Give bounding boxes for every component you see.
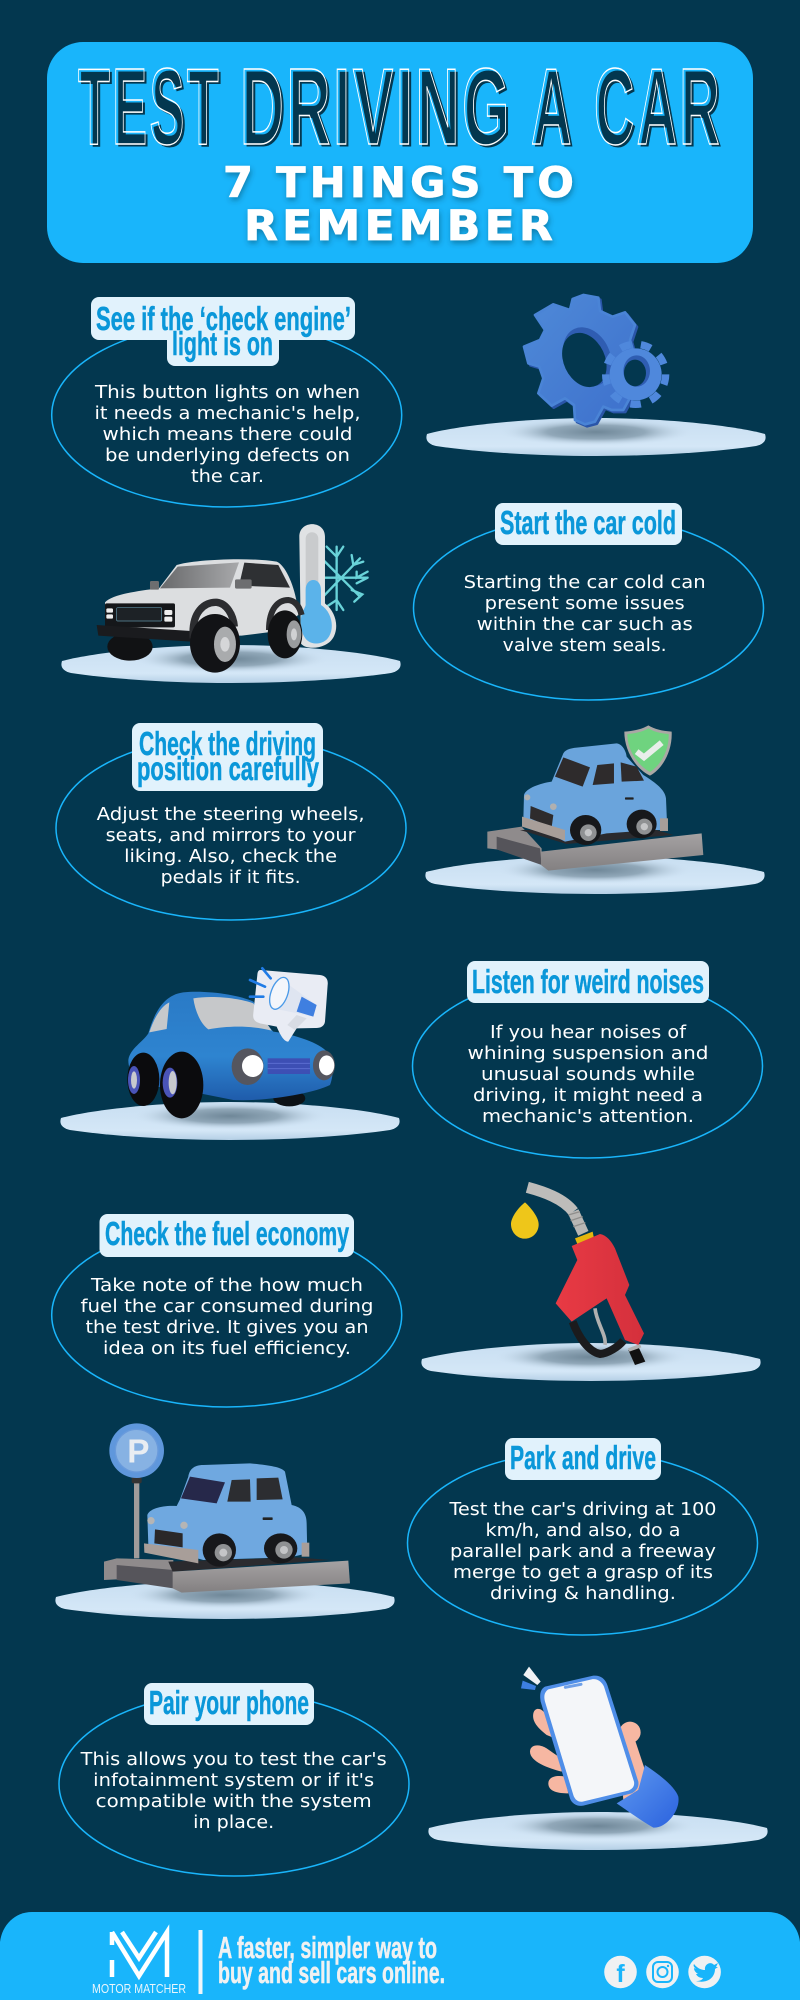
text: fuel economy: Take note of the how much: [90, 1275, 363, 1296]
platform 7: [428, 1812, 768, 1850]
label: fuel economy: Check the fuel economy: [105, 1215, 349, 1252]
icon: facebook: [604, 1956, 637, 1988]
text: check engine: This button lights on when: [94, 382, 360, 403]
icon: instagram: [646, 1956, 679, 1988]
title: A: [531, 46, 574, 168]
header panel: [47, 42, 753, 263]
title: DRIVING: [242, 48, 514, 170]
text: weird noises: driving, it might need a: [473, 1085, 703, 1106]
label: driving position: [132, 723, 323, 791]
text: park and drive: driving & handling.: [490, 1583, 676, 1604]
label: park and drive: [505, 1438, 661, 1480]
text: check engine: be underlying defects on: [105, 445, 350, 466]
text: park and drive: parallel park and a freeway: [450, 1541, 716, 1562]
text: check engine: it needs a mechanic's help,: [94, 403, 360, 424]
footer: [0, 1912, 800, 2000]
text: park and drive: km/h, and also, do a: [486, 1520, 680, 1541]
title: A: [534, 48, 576, 170]
icon: parking sign: P: [127, 1434, 149, 1471]
platform 3: [425, 856, 765, 894]
panel: weird noises: [412, 961, 762, 1158]
label: driving position: Check the driving: [139, 725, 316, 762]
icon: fuel nozzle: [511, 1187, 645, 1365]
label: fuel economy: [100, 1214, 354, 1257]
text: start cold: valve stem seals.: [503, 635, 667, 656]
logo: [92, 1932, 186, 1996]
icon: gears: [524, 295, 666, 426]
panel: start the car cold: [414, 503, 764, 700]
text: pair phone: compatible with the system: [96, 1791, 372, 1812]
icon: blue car with megaphone: [127, 968, 335, 1118]
text: pair phone: This allows you to test the car's: [80, 1749, 387, 1770]
icon: parking sign and car: [104, 1423, 350, 1593]
title: DRIVING: [240, 46, 512, 168]
text: fuel economy: idea on its fuel efficiency.: [103, 1338, 351, 1359]
text: park and drive: [448, 1499, 716, 1604]
text: weird noises: If you hear noises of: [490, 1022, 687, 1043]
label: driving position: position carefully: [137, 750, 319, 787]
icon: megaphone bubble: [250, 968, 328, 1042]
text: driving position: [97, 804, 365, 888]
text: driving position: seats, and mirrors to your: [106, 825, 356, 846]
platform 1: [426, 418, 766, 456]
text: check engine: which means there could: [102, 424, 352, 445]
text: driving position: Adjust the steering wheels,: [97, 804, 365, 825]
platform 6: [55, 1581, 395, 1619]
label: check engine: [91, 297, 355, 366]
icon: facebook: f: [616, 1960, 625, 1988]
label: start cold: Start the car cold: [500, 504, 676, 541]
label: check engine: See if the ‘check engine’: [96, 300, 351, 337]
text: park and drive: Test the car's driving at 100: [448, 1499, 716, 1520]
text: driving position: pedals if it fits.: [161, 867, 301, 888]
label: pair phone: Pair your phone: [149, 1684, 309, 1721]
subtitle: 7 THINGS TO: [223, 158, 578, 207]
text: start cold: within the car such as: [477, 614, 693, 635]
text: weird noises: [468, 1022, 708, 1127]
icon: car on lift with shield: [487, 725, 703, 871]
icon: suv with thermometer and snowflake: [97, 524, 368, 673]
panel: check engine light: [52, 297, 402, 507]
tagline: [218, 1930, 445, 1990]
panel: pair your phone: [59, 1683, 409, 1876]
text: weird noises: mechanic's attention.: [482, 1106, 694, 1127]
text: check engine: the car.: [191, 466, 264, 487]
text: driving position: liking. Also, check the: [124, 846, 337, 867]
tagline: buy and sell cars online.: [218, 1955, 445, 1990]
text: start cold: present some issues: [485, 593, 685, 614]
text: weird noises: unusual sounds while: [481, 1064, 695, 1085]
icon: shield: [624, 725, 672, 776]
label: start cold: [495, 503, 682, 545]
panel: fuel economy: [52, 1214, 402, 1407]
label: park and drive: Park and drive: [510, 1439, 656, 1476]
text: park and drive: merge to get a grasp of its: [453, 1562, 713, 1583]
text: start cold: [464, 572, 706, 656]
label: weird noises: [467, 961, 709, 1003]
label: check engine: light is on: [172, 325, 273, 362]
text: pair phone: in place.: [193, 1812, 274, 1833]
text: start cold: Starting the car cold can: [464, 572, 706, 593]
text: fuel economy: [80, 1275, 374, 1359]
platform 4: [60, 1102, 400, 1140]
text: fuel economy: fuel the car consumed during: [80, 1296, 374, 1317]
text: pair phone: [80, 1749, 387, 1833]
icon: parking sign: [109, 1423, 164, 1558]
subtitle: REMEMBER: [244, 201, 557, 250]
panel: driving position: [56, 723, 406, 920]
platform 2: [61, 645, 401, 683]
icon: twitter: [688, 1956, 721, 1988]
text: pair phone: infotainment system or if it's: [93, 1770, 374, 1791]
tagline: A faster, simpler way to: [218, 1930, 437, 1965]
text: fuel economy: the test drive. It gives you an: [86, 1317, 368, 1338]
text: weird noises: whining suspension and: [468, 1043, 708, 1064]
text: check engine: [94, 382, 360, 487]
subtitle: [223, 158, 578, 250]
icon: hand with phone: [521, 1667, 679, 1828]
title: TEST: [78, 46, 221, 168]
title: TEST: [80, 48, 224, 170]
logo: MOTOR MATCHER: [92, 1981, 186, 1996]
platform 5: [421, 1343, 761, 1381]
label: pair phone: [144, 1683, 314, 1725]
panel: park and drive: [408, 1438, 758, 1635]
